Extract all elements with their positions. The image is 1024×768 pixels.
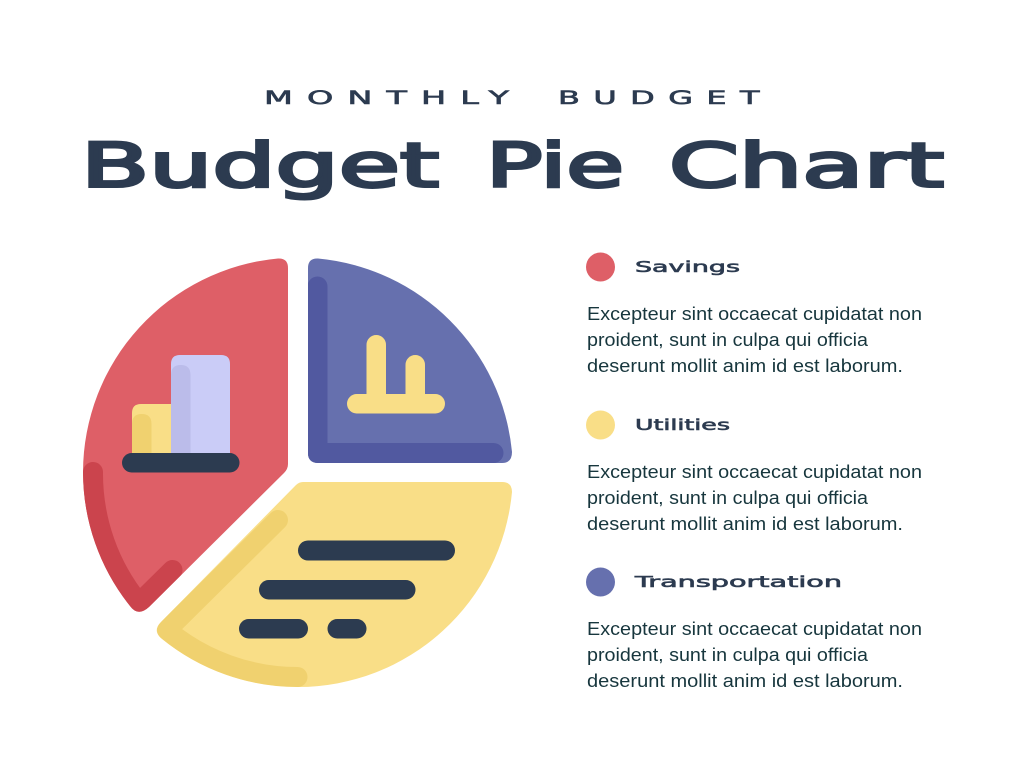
legend text: transportation: proident, sunt in culpa qui officia [587, 645, 869, 665]
pie chart [83, 258, 512, 687]
legend item: savings [586, 252, 922, 376]
pie slice: savings [83, 258, 288, 612]
title: Pie [486, 130, 624, 202]
legend text: savings: Excepteur sint occaecat cupidatat non [587, 304, 922, 324]
legend text: utilities: Excepteur sint occaecat cupidatat non [587, 462, 922, 482]
pie slice: transportation [308, 258, 512, 463]
legend dot: utilities [586, 410, 615, 440]
pie slice: utilities [157, 482, 512, 687]
legend dot: savings [586, 252, 615, 282]
legend item: transportation [586, 568, 922, 691]
legend item: utilities [586, 410, 922, 534]
legend heading: utilities: Utilities [635, 416, 730, 434]
text lines icon on utilities slice [239, 540, 455, 638]
legend text: savings: deserunt mollit anim id est laborum. [587, 356, 903, 376]
icon: bar chart on savings slice [122, 355, 240, 472]
legend heading: savings: Savings [635, 258, 740, 276]
legend text: utilities: proident, sunt in culpa qui officia [587, 488, 869, 508]
legend text: savings: proident, sunt in culpa qui officia [587, 330, 869, 350]
legend text: utilities: deserunt mollit anim id est laborum. [587, 514, 903, 534]
legend text: transportation: Excepteur sint occaecat cupidatat non [587, 619, 922, 639]
title: Budget [81, 130, 439, 202]
title: Chart [669, 130, 944, 202]
subtitle: MONTHLY [264, 87, 523, 109]
legend text: transportation: deserunt mollit anim id est laborum. [587, 671, 903, 691]
icon: bar chart on transportation slice [347, 335, 445, 414]
legend dot: transportation [586, 568, 615, 596]
legend heading: transportation: Transportation [633, 573, 842, 591]
subtitle: BUDGET [558, 87, 773, 109]
